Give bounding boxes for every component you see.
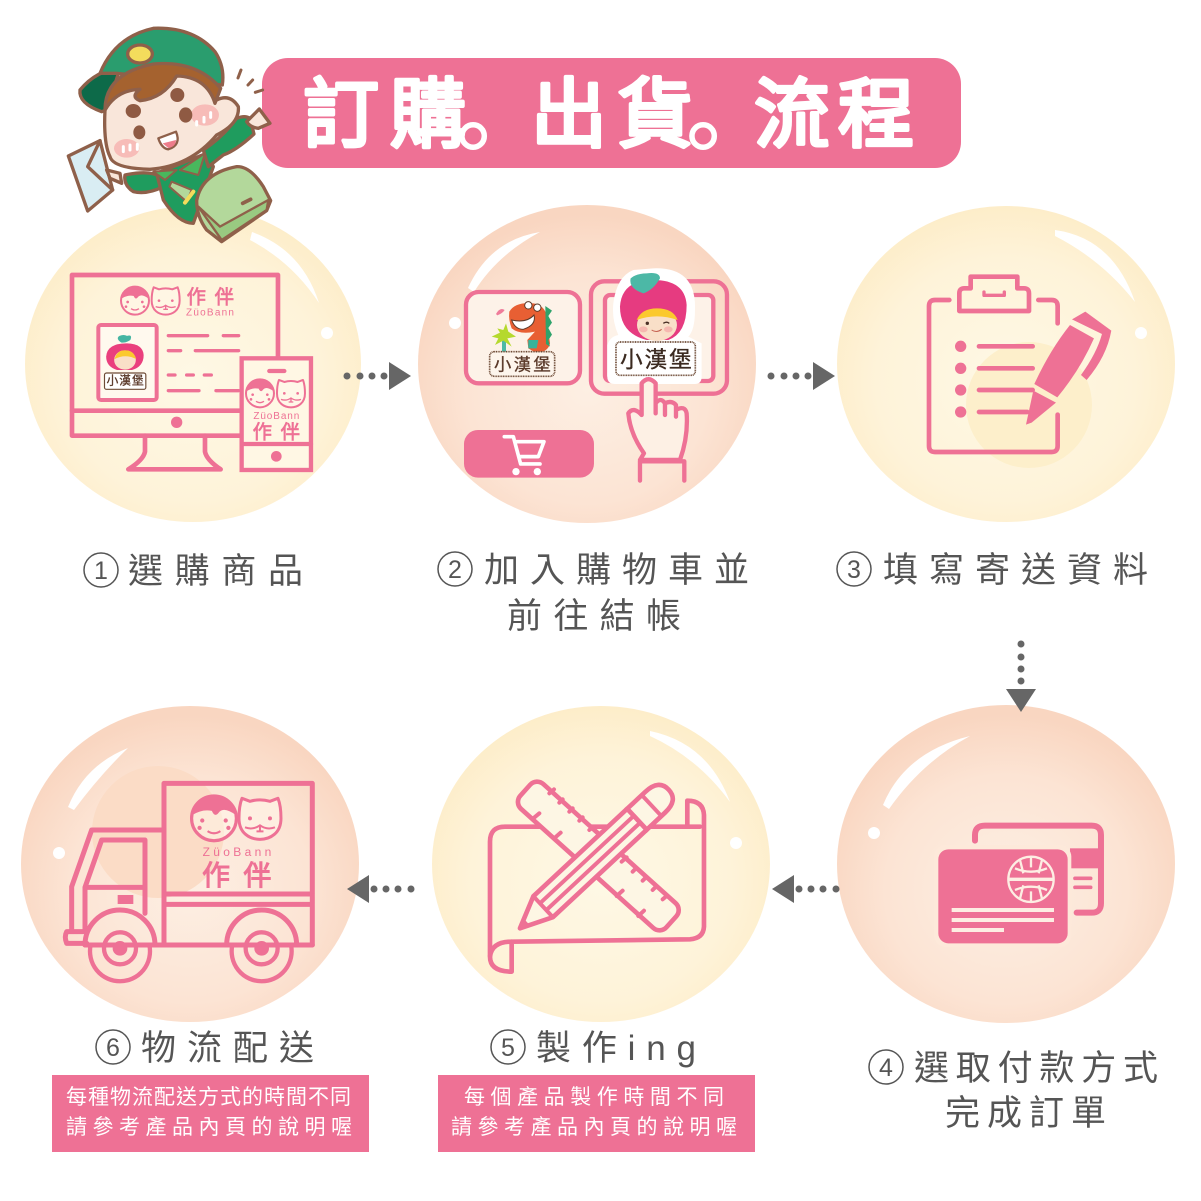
mascot: postman waving with letter and bag: [68, 28, 271, 242]
icon: delivery truck with brand logo: 作伴: [202, 860, 271, 891]
step 4 label: [869, 1049, 1158, 1133]
title banner: 流程: [754, 73, 914, 158]
panel: step 6 bubble, delivery: [21, 706, 359, 1022]
step 4 label: 選取付款方式: [914, 1049, 1158, 1088]
callout: step 5 note: 每個產品製作時間不同: [464, 1086, 724, 1109]
callout: step 5 note: 請參考產品內頁的說明喔: [451, 1116, 737, 1139]
icon: strawberry character sticker: 小漢堡: [620, 346, 692, 372]
panel: step 5 bubble, production: [432, 706, 770, 1022]
icon: credit cards with globe: [934, 826, 1102, 947]
icon: shopping cart: [504, 437, 544, 475]
arrow: step 4 to 5: [772, 875, 840, 903]
step 6 label: 物流配送: [141, 1029, 314, 1068]
title banner: 。: [456, 64, 544, 163]
step 6 label: 6: [106, 1034, 120, 1062]
icon: dinosaur sticker: [490, 302, 555, 376]
step 2 label: 加入購物車並: [484, 551, 749, 590]
title banner: 出貨: [531, 73, 693, 158]
step 4 label: 完成訂單: [945, 1094, 1106, 1133]
icon: tapping hand: [628, 379, 687, 460]
title banner: 訂購: [303, 73, 466, 158]
icon: desktop monitor and phone with brand logo: ZüoBann: [253, 411, 299, 422]
icon: dinosaur sticker: 小漢堡: [494, 355, 551, 375]
arrow: step 5 to 6: [347, 875, 414, 903]
icon: desktop monitor and phone with brand logo: 小漢堡: [107, 374, 144, 388]
panel: step 3 bubble, fill in shipping data: [837, 206, 1175, 522]
arrow: step 2 to 3: [768, 362, 835, 390]
step 3 label: 填寫寄送資料: [883, 551, 1148, 590]
step 2 label: [438, 551, 749, 636]
icon: delivery truck with brand logo: [65, 783, 312, 981]
step 2 label: 2: [448, 556, 462, 584]
step 4 label: 4: [879, 1054, 893, 1082]
arrow: step 3 to 4: [1006, 640, 1036, 712]
icon: scroll, ruler and pencil: [490, 778, 704, 972]
step 5 label: 製作ing: [536, 1029, 696, 1068]
title banner: 。: [686, 64, 774, 163]
arrow: step 1 to 2: [344, 362, 411, 390]
step 1 label: 選購商品: [128, 552, 303, 591]
callout: step 6 note: 請參考產品內頁的說明喔: [66, 1116, 352, 1139]
icon: clipboard and pen: [929, 277, 1111, 452]
callout: step 5 note: [438, 1075, 755, 1152]
callout: step 6 note: [52, 1075, 369, 1152]
step 3 label: 3: [847, 556, 861, 584]
icon: product cards, cart button and tapping hand: [464, 268, 727, 481]
panel: step 4 bubble, choose payment: [837, 705, 1175, 1023]
icon: desktop monitor and phone with brand logo: 作伴: [187, 287, 234, 309]
icon: desktop monitor and phone with brand logo: [72, 275, 311, 470]
callout: step 6 note: 每種物流配送方式的時間不同: [66, 1086, 351, 1109]
step 1 label: 1: [94, 557, 108, 585]
step 2 label: 前往結帳: [507, 597, 681, 636]
step 5 label: 5: [501, 1034, 515, 1062]
title banner: [262, 58, 961, 168]
icon: desktop monitor and phone with brand logo: 作伴: [253, 422, 300, 444]
icon: delivery truck with brand logo: ZüoBann: [203, 845, 271, 859]
panel: step 2 bubble, add to cart: [418, 205, 756, 523]
icon: desktop monitor and phone with brand logo: ZüoBann: [186, 308, 234, 319]
icon: strawberry character sticker: [607, 268, 702, 384]
panel: step 1 bubble, select product: [25, 206, 361, 522]
